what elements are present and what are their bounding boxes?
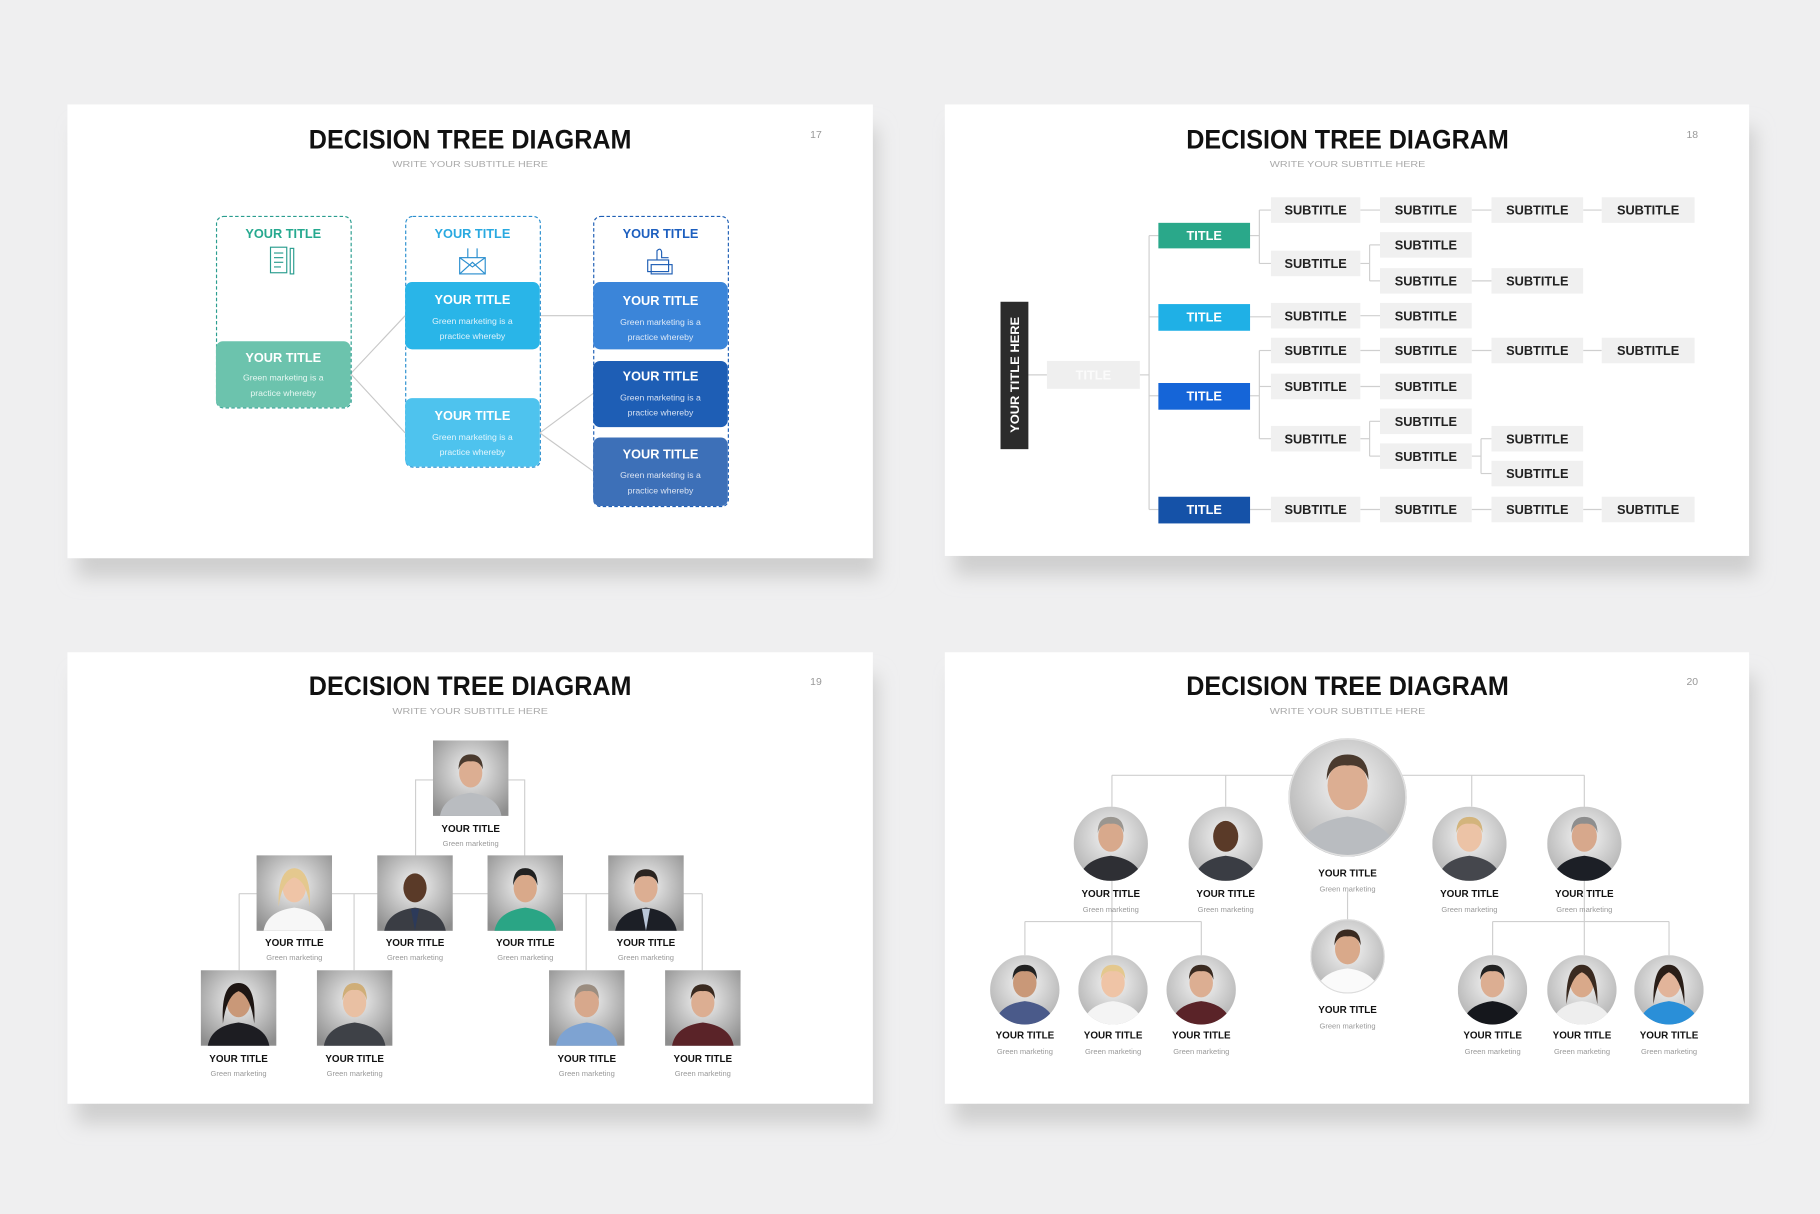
column 2: YOUR TITLE [435, 226, 510, 241]
circle labels: YOUR TITLE [1081, 889, 1141, 900]
title 17: DECISION TREE DIAGRAM [309, 125, 631, 155]
page number 19: 19 [810, 677, 822, 688]
photo labels: YOUR TITLE [496, 938, 555, 949]
photos [201, 740, 741, 1046]
circle labels: YOUR TITLE [1463, 1031, 1522, 1042]
subtitle boxes [1271, 197, 1695, 522]
column 3: YOUR TITLE [623, 446, 698, 461]
subtitle boxes: SUBTITLE [1395, 238, 1457, 253]
subtitle boxes: SUBTITLE [1395, 414, 1457, 429]
circle labels: YOUR TITLE [1084, 1031, 1143, 1042]
org connectors [239, 780, 702, 970]
circle labels: Green marketing [1083, 905, 1139, 914]
circle labels: Green marketing [1465, 1047, 1521, 1056]
title boxes [1158, 223, 1250, 523]
subtitle boxes: SUBTITLE [1284, 203, 1347, 218]
subtitle boxes: SUBTITLE [1506, 343, 1568, 358]
subtitle 20: WRITE YOUR SUBTITLE HERE [1270, 706, 1426, 716]
circle labels: Green marketing [1320, 884, 1376, 893]
photo labels: YOUR TITLE [386, 938, 445, 949]
subtitle 17: WRITE YOUR SUBTITLE HERE [392, 159, 548, 169]
column 2: YOUR TITLE [435, 408, 510, 423]
circle labels: YOUR TITLE [1440, 889, 1499, 900]
title 19: DECISION TREE DIAGRAM [309, 671, 631, 701]
circle labels: Green marketing [1173, 1047, 1229, 1056]
circle labels: YOUR TITLE [996, 1031, 1055, 1042]
column 3: practice whereby [628, 332, 694, 342]
title boxes: TITLE [1187, 309, 1222, 324]
subtitle boxes: SUBTITLE [1284, 379, 1347, 394]
circle labels: Green marketing [1556, 905, 1612, 914]
circle labels: YOUR TITLE [1172, 1031, 1231, 1042]
shadows [77, 128, 1755, 1123]
subtitle boxes: SUBTITLE [1395, 343, 1457, 358]
subtitle boxes: SUBTITLE [1395, 502, 1457, 517]
title boxes: TITLE [1187, 502, 1222, 517]
photo labels: Green marketing [618, 953, 674, 962]
column 1: YOUR TITLE [245, 226, 321, 241]
subtitle boxes: SUBTITLE [1395, 449, 1457, 464]
panel: slide 19 [67, 652, 873, 1104]
column 3: Green marketing is a [620, 392, 701, 402]
page number 17: 17 [810, 130, 822, 141]
subtitle boxes: SUBTITLE [1284, 431, 1347, 446]
tree connectors [1028, 210, 1602, 510]
icon: thumbs up [648, 249, 672, 274]
column 3: YOUR TITLE [623, 369, 698, 384]
column 3: practice whereby [628, 407, 694, 417]
panel: slide 20 [945, 652, 1749, 1104]
circle labels: Green marketing [1320, 1021, 1376, 1030]
circle labels: YOUR TITLE [1196, 889, 1255, 900]
column 2 [405, 216, 540, 467]
circle labels: YOUR TITLE [1640, 1031, 1699, 1042]
photo labels: Green marketing [443, 839, 499, 848]
root title box [1047, 361, 1140, 389]
subtitle boxes: SUBTITLE [1506, 203, 1568, 218]
subtitle boxes: SUBTITLE [1395, 308, 1457, 323]
circle labels: Green marketing [1085, 1047, 1141, 1056]
column 3: Green marketing is a [620, 470, 701, 480]
circle labels: YOUR TITLE [1318, 868, 1377, 879]
root vertical label: YOUR TITLE HERE [1009, 317, 1022, 433]
circle connectors [1025, 775, 1669, 955]
circle labels: Green marketing [1641, 1047, 1697, 1056]
photo labels: Green marketing [211, 1069, 267, 1078]
photo labels: YOUR TITLE [209, 1054, 268, 1065]
panel: slide 18 [945, 104, 1749, 556]
circle labels: YOUR TITLE [1318, 1005, 1377, 1016]
subtitle boxes: SUBTITLE [1506, 274, 1568, 289]
subtitle boxes: SUBTITLE [1506, 466, 1568, 481]
icon: envelope [460, 248, 485, 274]
subtitle boxes: SUBTITLE [1395, 274, 1457, 289]
circle labels: Green marketing [1554, 1047, 1610, 1056]
column 2: practice whereby [440, 447, 506, 457]
circle labels [996, 868, 1699, 1056]
column 1 [216, 216, 351, 408]
photo labels: Green marketing [497, 953, 553, 962]
page number 20: 20 [1686, 677, 1698, 688]
column 2: Green marketing is a [432, 316, 513, 326]
subtitle boxes: SUBTITLE [1284, 256, 1347, 271]
column 1: practice whereby [250, 388, 317, 398]
column 3: practice whereby [628, 485, 694, 495]
connector lines [351, 316, 593, 471]
column 3 [593, 216, 728, 507]
subtitle 19: WRITE YOUR SUBTITLE HERE [392, 706, 548, 716]
circle labels: YOUR TITLE [1555, 889, 1614, 900]
photo labels: Green marketing [266, 953, 322, 962]
photo labels: Green marketing [387, 953, 443, 962]
title boxes: TITLE [1187, 228, 1222, 243]
subtitle boxes: SUBTITLE [1395, 203, 1457, 218]
subtitle boxes: SUBTITLE [1617, 203, 1679, 218]
circle photos [990, 738, 1704, 1025]
page number 18: 18 [1686, 130, 1698, 141]
photo labels: Green marketing [559, 1069, 615, 1078]
root title box: TITLE [1076, 368, 1111, 383]
subtitle boxes: SUBTITLE [1284, 502, 1347, 517]
photo labels: Green marketing [675, 1069, 731, 1078]
column 3: YOUR TITLE [623, 293, 698, 308]
title 18: DECISION TREE DIAGRAM [1186, 125, 1509, 155]
photo labels: YOUR TITLE [617, 938, 676, 949]
photo labels: YOUR TITLE [325, 1054, 384, 1065]
column 3: Green marketing is a [620, 317, 701, 327]
column 3: YOUR TITLE [623, 226, 698, 241]
subtitle boxes: SUBTITLE [1284, 343, 1347, 358]
subtitle boxes: SUBTITLE [1284, 308, 1347, 323]
title boxes: TITLE [1187, 388, 1222, 403]
subtitle boxes: SUBTITLE [1506, 431, 1568, 446]
circle labels: Green marketing [1441, 905, 1497, 914]
icon: document [271, 247, 294, 274]
subtitle boxes: SUBTITLE [1506, 502, 1568, 517]
photo labels: Green marketing [327, 1069, 383, 1078]
root vertical label [1001, 302, 1028, 449]
photo labels: YOUR TITLE [441, 824, 500, 835]
title 20: DECISION TREE DIAGRAM [1186, 671, 1509, 701]
column 2: Green marketing is a [432, 432, 513, 442]
column 1: Green marketing is a [243, 373, 324, 383]
panel: slide 17 [67, 104, 873, 558]
column 2: YOUR TITLE [435, 292, 510, 307]
column 1: YOUR TITLE [245, 350, 321, 365]
photo labels: YOUR TITLE [557, 1054, 616, 1065]
subtitle boxes: SUBTITLE [1617, 502, 1679, 517]
circle labels: Green marketing [997, 1047, 1053, 1056]
column 2: practice whereby [440, 331, 506, 341]
subtitle boxes: SUBTITLE [1395, 379, 1457, 394]
photo labels: YOUR TITLE [265, 938, 324, 949]
circle labels: YOUR TITLE [1553, 1031, 1612, 1042]
subtitle boxes: SUBTITLE [1617, 343, 1679, 358]
circle labels: Green marketing [1198, 905, 1254, 914]
subtitle 18: WRITE YOUR SUBTITLE HERE [1270, 159, 1426, 169]
photo labels: YOUR TITLE [674, 1054, 733, 1065]
photo labels [209, 824, 733, 1078]
